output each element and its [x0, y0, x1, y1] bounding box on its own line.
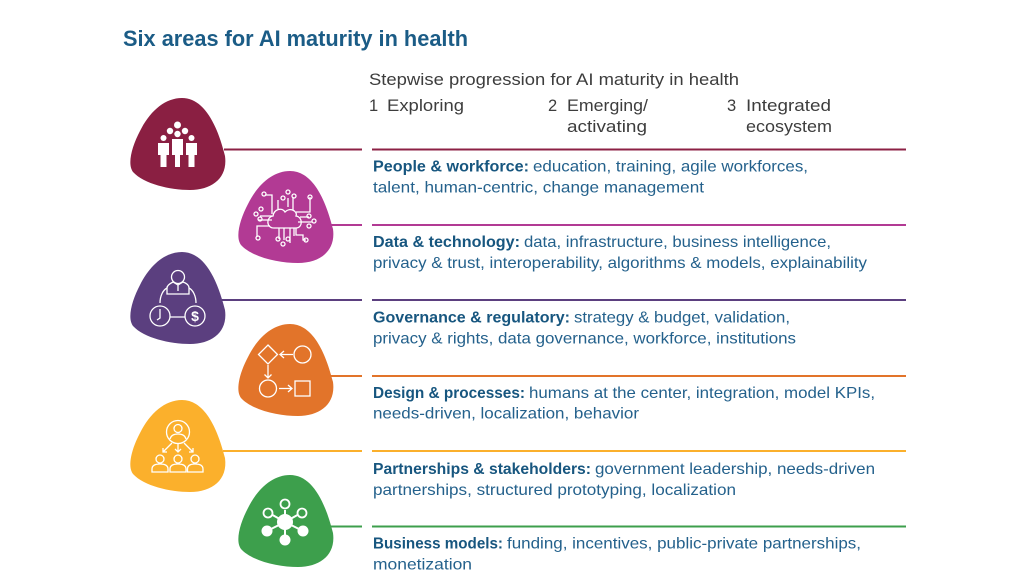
blob: [238, 324, 333, 416]
description: Data & technology:: [373, 234, 520, 251]
connector line: [224, 148, 906, 150]
row: governance and regulatory: [130, 252, 906, 348]
description: [373, 385, 875, 422]
description: privacy & rights, data governance, workforce, institutions: [373, 330, 796, 348]
row: people and workforce: [130, 98, 906, 196]
step 3: ecosystem: [746, 118, 832, 136]
step 2: [548, 97, 648, 136]
description: [373, 234, 867, 272]
blob: [238, 171, 333, 263]
description: Design & processes:: [373, 385, 525, 402]
description: government leadership, needs-driven: [595, 461, 875, 478]
description: Governance & regulatory:: [373, 310, 570, 326]
icon: governance person, clock and dollar: $: [191, 308, 199, 324]
description: funding, incentives, public-private partnerships,: [507, 536, 861, 552]
description: [373, 158, 808, 196]
description: Partnerships & stakeholders:: [373, 461, 591, 478]
description: humans at the center, integration, model KPIs,: [529, 385, 875, 402]
step 1: 1: [369, 97, 378, 115]
blob: [130, 98, 225, 190]
blob: [130, 252, 225, 344]
step 2: 2: [548, 97, 557, 115]
description: education, training, agile workforces,: [533, 158, 808, 176]
description: talent, human-centric, change management: [373, 180, 705, 196]
icon: network hub: [262, 500, 308, 546]
description: [373, 461, 875, 499]
connector line: [330, 375, 906, 377]
step 3: Integrated: [746, 97, 831, 115]
title: Six areas for AI maturity in health: [123, 26, 468, 51]
description: strategy & budget, validation,: [574, 310, 790, 326]
icon: process flow: [258, 345, 311, 397]
description: partnerships, structured prototyping, localization: [373, 482, 736, 499]
description: [373, 536, 861, 574]
step 2: activating: [567, 118, 647, 136]
step 2: Emerging/: [567, 97, 648, 115]
connector line: [223, 450, 906, 452]
description: privacy & trust, interoperability, algorithms & models, explainability: [373, 255, 867, 272]
blob: [130, 400, 225, 492]
connector line: [330, 526, 906, 528]
description: [373, 310, 796, 348]
row: business models: [238, 475, 906, 574]
step 1: Exploring: [387, 97, 464, 115]
progression heading: Stepwise progression for AI maturity in health: [369, 71, 739, 89]
icon: leader and stakeholders: [152, 420, 203, 472]
header: stepwise progression: [369, 71, 832, 136]
icon: cloud circuit: [254, 190, 316, 246]
description: data, infrastructure, business intelligence,: [524, 234, 831, 251]
connector line: [222, 299, 906, 301]
row: partnerships and stakeholders: [130, 400, 906, 499]
description: needs-driven, localization, behavior: [373, 406, 640, 422]
row: data and technology: [238, 171, 906, 272]
description: Business models:: [373, 536, 503, 552]
blob: [238, 475, 333, 567]
step 3: [727, 97, 832, 136]
connector line: [330, 224, 906, 226]
icon: governance person, clock and dollar: [150, 270, 205, 326]
step 3: 3: [727, 97, 736, 115]
description: People & workforce:: [373, 158, 529, 176]
icon: people: [158, 122, 197, 167]
row: design and processes: [238, 324, 906, 422]
description: monetization: [373, 556, 472, 574]
